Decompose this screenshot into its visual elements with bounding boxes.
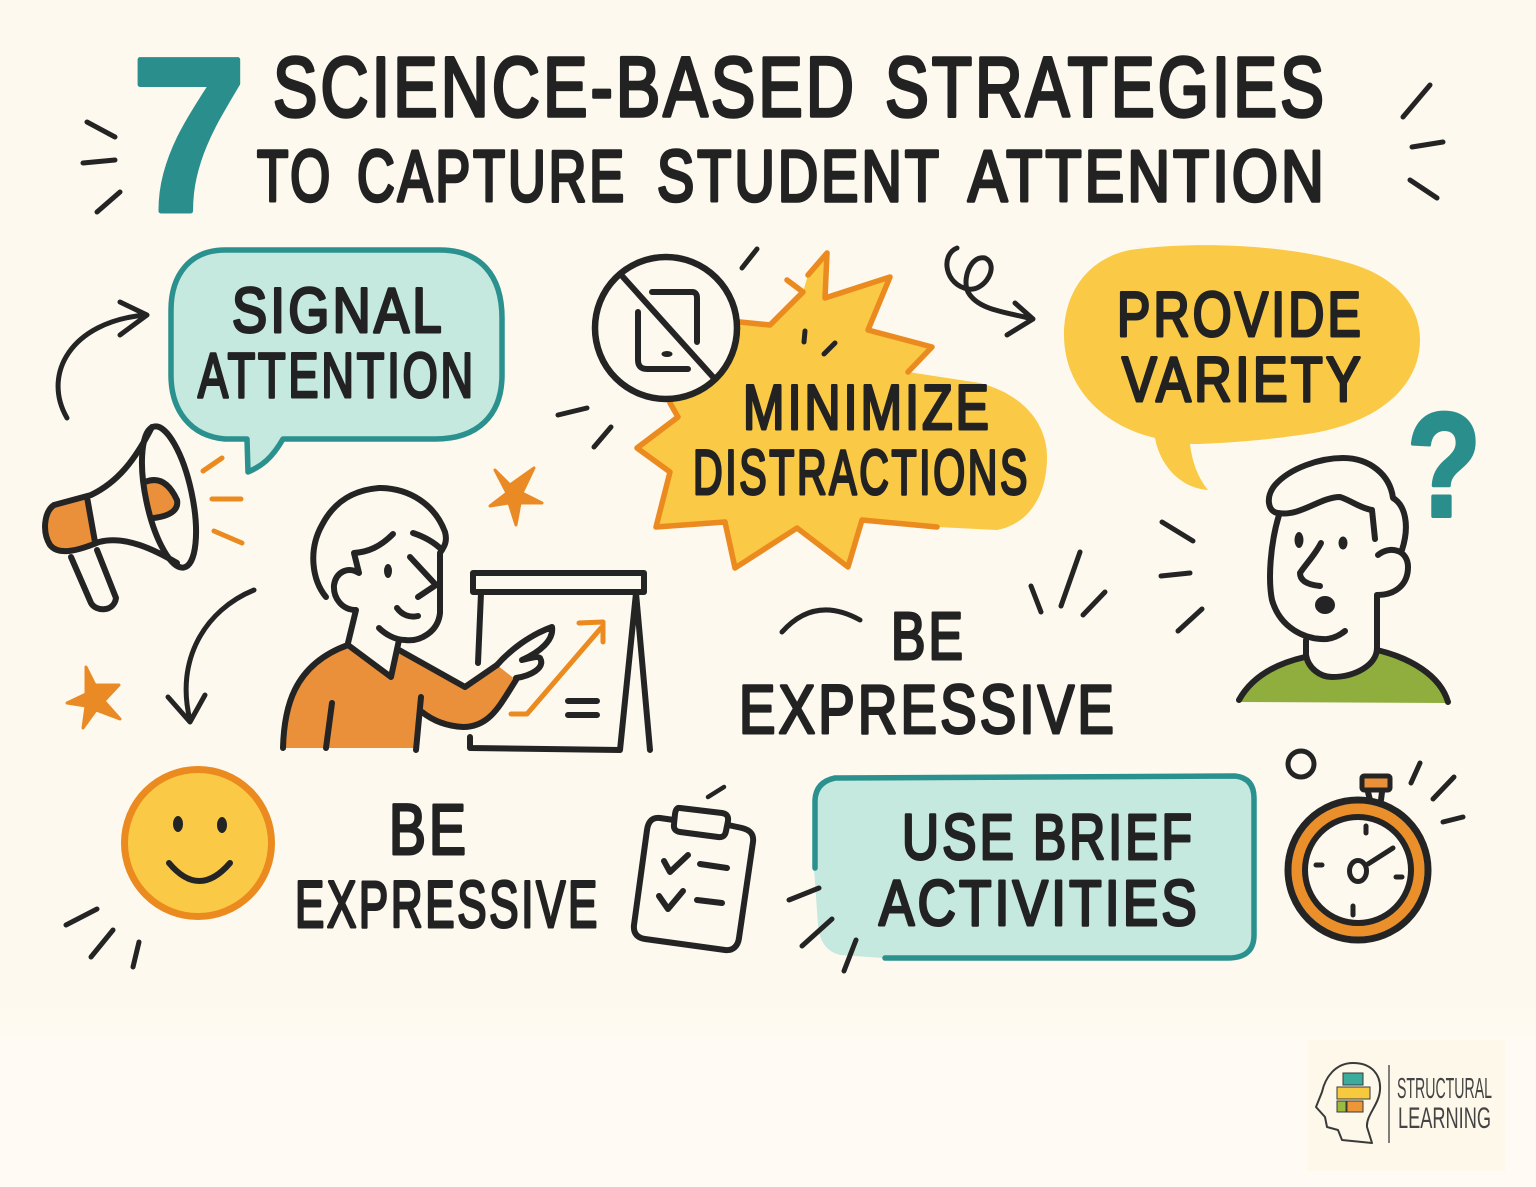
bubble fill xyxy=(814,778,1254,958)
title: ATTENTION xyxy=(968,137,1327,217)
hair and face xyxy=(334,533,442,643)
logo head icon xyxy=(1316,1063,1380,1143)
logo blocks xyxy=(1337,1073,1370,1112)
burst outline xyxy=(637,253,937,568)
arrow: spiral xyxy=(947,248,1033,335)
label xyxy=(693,373,1030,508)
label xyxy=(1117,280,1364,415)
neck xyxy=(1306,595,1377,677)
flipchart xyxy=(470,573,650,750)
logo wordmark xyxy=(1397,1073,1492,1135)
icon: clipboard checklist xyxy=(634,787,753,950)
checks xyxy=(659,855,727,909)
chart lines xyxy=(568,701,597,715)
face xyxy=(1294,532,1304,548)
icon: stopwatch xyxy=(1288,776,1428,940)
text: be expressive (middle): EXPRESSIVE xyxy=(739,671,1117,748)
shirt xyxy=(283,645,516,748)
panel: use brief activities xyxy=(814,776,1254,958)
arrow: curved downward xyxy=(168,590,254,722)
label: BRIEF xyxy=(1033,801,1195,873)
speech bubble xyxy=(1064,245,1420,490)
head and hair xyxy=(1269,458,1406,550)
small circle and ticks xyxy=(1288,751,1463,822)
label: SIGNAL xyxy=(232,276,445,346)
title: 7 xyxy=(131,12,247,258)
text: be expressive (middle) xyxy=(739,599,1117,748)
text: be expressive (lower): BE xyxy=(389,791,469,870)
student thought ticks xyxy=(1161,522,1202,631)
head xyxy=(313,488,446,640)
ear xyxy=(1377,550,1408,595)
icon: orange star small xyxy=(67,667,120,728)
distraction ticks xyxy=(558,249,757,447)
icon: orange star xyxy=(490,468,542,525)
sound rays xyxy=(203,458,242,543)
activity ticks xyxy=(789,888,856,971)
smiley ticks xyxy=(66,909,139,967)
icon: curious student xyxy=(1239,458,1448,703)
icon: no phone sign xyxy=(595,257,737,399)
bubble outline xyxy=(815,776,1254,958)
speech bubble xyxy=(171,250,502,472)
title: SCIENCE-BASED xyxy=(273,40,857,134)
title: TO xyxy=(257,137,333,217)
title: STRATEGIES xyxy=(885,40,1327,134)
text: be expressive (lower): EXPRESSIVE xyxy=(295,867,600,941)
accent arc and ticks xyxy=(782,552,1105,632)
label: DISTRACTIONS xyxy=(693,438,1030,508)
text: be expressive (lower) xyxy=(295,791,600,941)
icon: teacher at flipchart xyxy=(283,488,650,750)
burst shape xyxy=(637,253,1047,568)
label: MINIMIZE xyxy=(743,373,992,443)
icon: question mark: ? xyxy=(1407,383,1481,548)
label xyxy=(879,801,1200,939)
logo panel xyxy=(1308,1040,1505,1171)
label: ACTIVITIES xyxy=(879,867,1200,939)
label: USE xyxy=(902,801,1017,873)
icon: smiley xyxy=(124,770,272,916)
label xyxy=(198,276,476,411)
arrow: curved to bubble xyxy=(58,302,147,418)
title xyxy=(131,12,1327,258)
hand xyxy=(497,627,552,678)
text: be expressive (middle): BE xyxy=(891,599,966,674)
panel: provide variety xyxy=(1064,245,1420,490)
title accent ticks xyxy=(83,85,1443,212)
title: STUDENT xyxy=(657,137,942,217)
label: VARIETY xyxy=(1122,345,1364,415)
spark marks xyxy=(804,331,835,354)
chart arrow xyxy=(511,622,603,714)
shirt xyxy=(1239,650,1448,703)
label: ATTENTION xyxy=(198,341,476,411)
panel: minimize distractions xyxy=(637,253,1047,568)
panel: signal attention xyxy=(171,250,502,472)
label: PROVIDE xyxy=(1117,280,1364,350)
title: CAPTURE xyxy=(357,137,627,217)
icon: megaphone xyxy=(45,422,242,609)
